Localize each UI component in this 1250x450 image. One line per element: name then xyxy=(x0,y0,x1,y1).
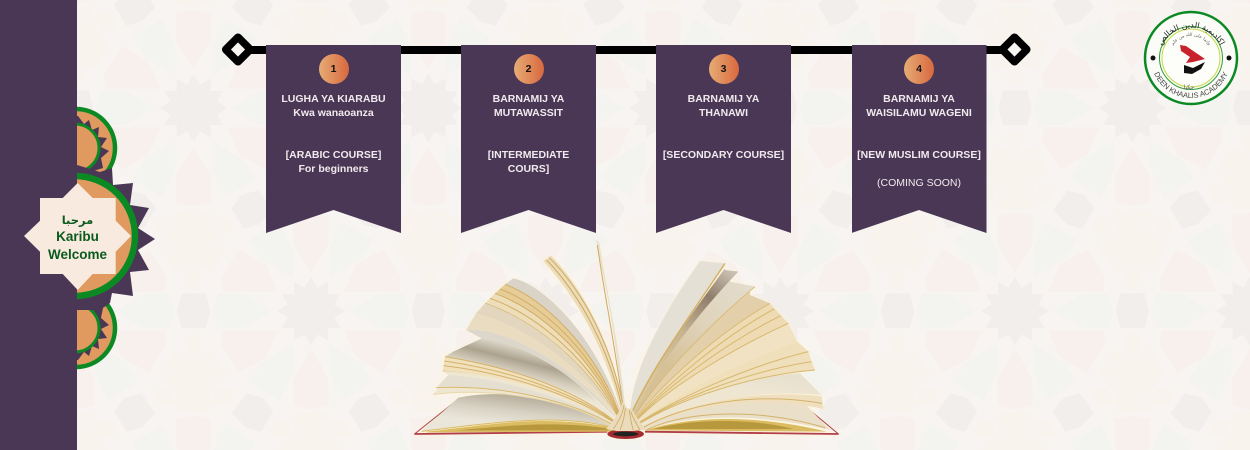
banner 3: Secondary course xyxy=(656,45,791,233)
page bundle at the spine xyxy=(606,402,646,431)
banner 1 heading: LUGHA YA KIARABU xyxy=(281,93,386,105)
welcome text: Karibu: Karibu xyxy=(56,229,99,244)
open book illustration xyxy=(414,240,839,440)
number badge 2: 2 xyxy=(526,62,531,74)
banner 2 heading: MUTAWASSIT xyxy=(494,107,563,119)
welcome text: Arabic: مرحبا xyxy=(62,213,93,227)
banner 4 coming soon note: (COMING SOON) xyxy=(877,177,961,189)
academy logo: DEEN KHAALIS ACADEMY xyxy=(1154,72,1227,98)
banner 3 description: [SECONDARY COURSE] xyxy=(663,149,784,161)
left pages fan xyxy=(422,240,626,432)
right pages fan xyxy=(631,261,830,430)
banner 3 heading: BARNAMIJ YA xyxy=(688,93,759,105)
banner 1 description: [ARABIC COURSE] xyxy=(286,149,381,161)
banner 2 description: COURS] xyxy=(508,163,549,175)
banner 2 description: [INTERMEDIATE xyxy=(488,149,569,161)
hanging rail with diamond ends xyxy=(222,34,1030,66)
banner 2: Intermediate course xyxy=(461,45,596,233)
banner 1 description xyxy=(286,150,381,174)
number badge 3: 3 xyxy=(721,62,726,74)
banner 2 heading xyxy=(493,95,564,116)
banner 4 heading: WAISILAMU WAGENI xyxy=(866,107,972,119)
banner 4 description: [NEW MUSLIM COURSE] xyxy=(857,149,981,161)
book cover and spine xyxy=(414,399,839,439)
number badge 4: 4 xyxy=(916,62,922,74)
banner 2 heading: BARNAMIJ YA xyxy=(493,93,564,105)
academy logo xyxy=(1144,10,1238,106)
left purple side panel with welcome badge xyxy=(0,0,155,450)
number badge 4 xyxy=(904,54,934,84)
number badge 1 xyxy=(318,54,348,84)
number badge 2 xyxy=(514,54,544,84)
banner 1: Arabic course xyxy=(266,45,401,233)
banner 3 heading: THANAWI xyxy=(699,107,748,119)
academy logo: اكاديمية الدين الخالص xyxy=(1160,22,1226,46)
banner 1 heading xyxy=(282,95,385,116)
banner 1 heading: Kwa wanaoanza xyxy=(293,107,374,119)
banner 4 heading xyxy=(866,95,972,116)
banner 3 heading xyxy=(688,95,759,116)
banner 2 description xyxy=(488,150,569,174)
banner 1 description: For beginners xyxy=(298,163,368,175)
badge ornament: circles and stars xyxy=(0,0,155,450)
number badge 1: 1 xyxy=(331,62,336,74)
banner 4 heading: BARNAMIJ YA xyxy=(883,93,955,105)
number badge 3 xyxy=(708,54,738,84)
academy logo: حكيا xyxy=(1184,84,1195,91)
welcome text: Welcome: Welcome xyxy=(48,247,107,262)
academy logo: وإنما على الله من علم xyxy=(1172,32,1210,46)
banner 4: New Muslim course xyxy=(852,45,986,233)
